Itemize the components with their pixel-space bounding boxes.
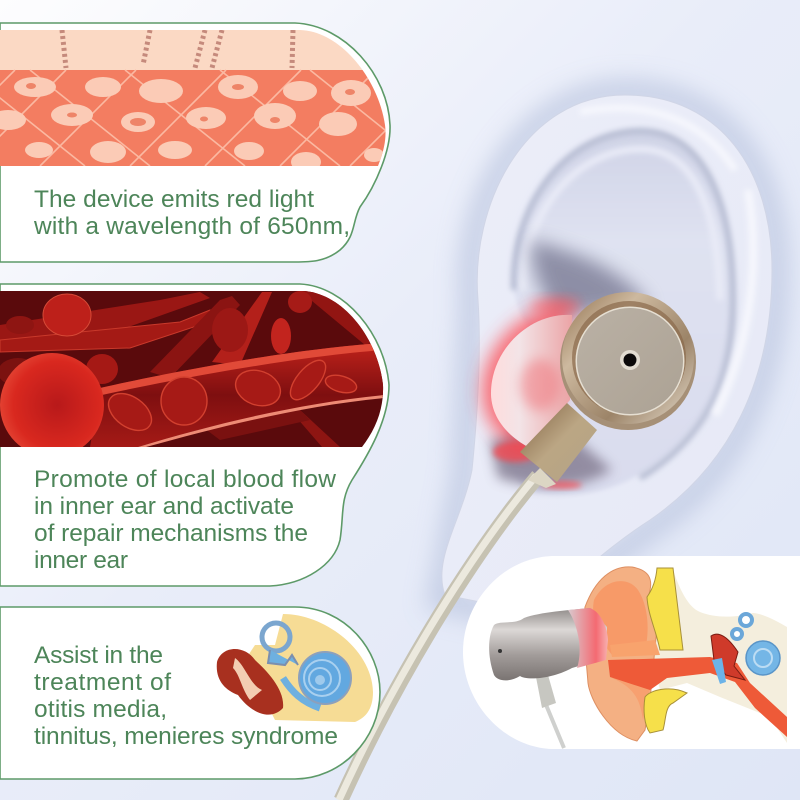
- text: blood flow: Promote of local blood flow: [34, 466, 336, 493]
- text: red light: The device emits red light: [34, 186, 314, 213]
- text: blood flow: of repair mechanisms the: [34, 520, 308, 547]
- text: treatment: otitis media,: [34, 696, 167, 723]
- helix groove shadow: [514, 131, 733, 478]
- stem: [520, 403, 597, 482]
- eardrum: [712, 658, 726, 684]
- hole: [620, 350, 640, 370]
- text: treatment: Assist in the: [34, 642, 163, 669]
- ear canal: [608, 657, 787, 737]
- disc: [577, 308, 683, 414]
- inner ear illustration: [217, 614, 373, 722]
- text: red light: with a wavelength of 650nm,: [33, 213, 350, 240]
- canals: [740, 614, 752, 626]
- blood vessels image: [0, 291, 400, 457]
- device metal body: [489, 608, 607, 680]
- main vessel: [90, 343, 384, 447]
- text: treatment: tinnitus, menieres syndrome: [34, 723, 338, 750]
- text: treatment: treatment of: [34, 669, 171, 696]
- upper cartilage: [647, 568, 683, 650]
- panel: blood flow: [0, 284, 400, 586]
- ear tip: [491, 315, 572, 447]
- ear body: [442, 95, 772, 612]
- ear illustration: [440, 92, 776, 620]
- skin cells image: [0, 30, 386, 166]
- device cable: [544, 700, 564, 748]
- panel: treatment: [0, 607, 380, 779]
- cochlea: [283, 678, 320, 708]
- panel: ear diagram: [463, 556, 800, 749]
- text: blood flow: in inner ear and activate: [34, 493, 294, 520]
- pinna: [584, 567, 657, 741]
- earbud: [520, 292, 696, 488]
- text: red light: [33, 186, 350, 240]
- text: blood flow: [34, 466, 336, 574]
- cross-section of ear: [584, 567, 787, 743]
- bone: [245, 614, 373, 722]
- red light glow: [482, 298, 582, 489]
- cable: [339, 476, 538, 800]
- text: treatment: [34, 642, 338, 750]
- concha shadow: [531, 240, 650, 316]
- device stem: [535, 668, 556, 708]
- device silicone tip: [568, 608, 608, 668]
- panel: red light: [0, 23, 430, 262]
- lower cartilage: [644, 689, 687, 733]
- cochlea: [746, 641, 780, 675]
- middle ear: [217, 649, 283, 715]
- ear halo: [440, 92, 776, 620]
- helix highlight: [715, 190, 753, 415]
- bone: [650, 568, 787, 743]
- inner bowl: [505, 131, 733, 495]
- housing ring: [560, 294, 696, 430]
- text: blood flow: inner ear: [34, 547, 128, 574]
- middle ear: [711, 634, 745, 680]
- big red cell: [0, 353, 104, 457]
- canals: [262, 623, 290, 651]
